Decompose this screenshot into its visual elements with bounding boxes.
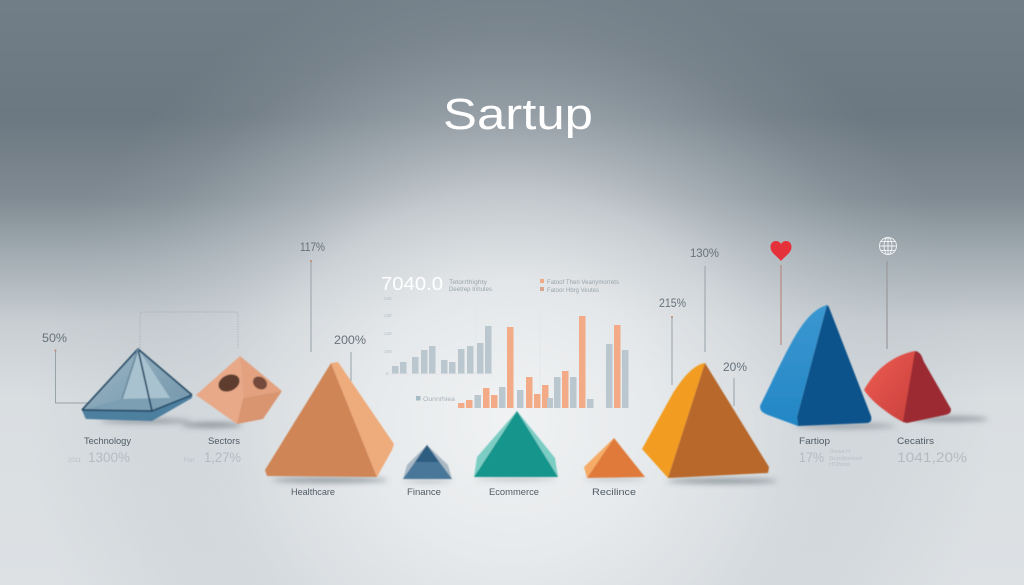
label: Cecatirs: [897, 436, 967, 465]
callout: 117%: [300, 240, 325, 352]
label: Healthcare: Healthcare: [291, 487, 335, 498]
title: Sartup: [443, 90, 593, 139]
label: Sectors: 1,27%: [204, 449, 241, 465]
label: Recilince: Recilince: [592, 487, 636, 498]
chart subtitle: Deetrep Inhutes: [449, 287, 492, 293]
callout: 200%: [334, 333, 366, 381]
label: Sectors: Fort: [184, 458, 195, 464]
shape: glass pyramid: [82, 349, 192, 421]
shape: healthcare pyramid: [265, 362, 394, 477]
upper grey bars: [392, 326, 492, 374]
label: Cecatirs: 1041,20%: [897, 449, 967, 465]
shadow layer: [100, 416, 988, 484]
label: Fartiop: Somitonrad: [829, 456, 862, 462]
callout: 130%: [690, 246, 719, 352]
lower bars: [458, 316, 628, 408]
callout: 117%: 117%: [300, 240, 325, 254]
label: Fartiop: Jhowa H: [829, 449, 850, 455]
label: Ecommerce: Ecommerce: [489, 487, 539, 498]
icon: globe with leader line: [880, 238, 896, 349]
chart headline number: 7040.0: [381, 274, 443, 294]
chart axis labels: 120: [384, 331, 392, 336]
shape: finance pyramid: [403, 445, 452, 479]
chart axis labels: 0: [386, 371, 389, 376]
chart legend: Fatoof Then Veanymorrets: [547, 280, 619, 286]
chart axis labels: 100: [384, 349, 392, 354]
chart panel: [381, 274, 628, 408]
label: Technology: 2011: [68, 458, 82, 464]
chart subtitle: [449, 280, 492, 293]
callout: 130%: 130%: [690, 246, 719, 260]
label: Fartiop: [799, 436, 862, 468]
chart axis labels: 140: [384, 296, 392, 301]
label: Fartiop: Fartiop: [799, 436, 830, 447]
callout: 215%: [659, 296, 686, 385]
chart subtitle: Tetorrthighty: [449, 280, 487, 286]
shape: blue rounded pyramid: [760, 305, 871, 426]
shape: peach pyramid with holes: [196, 356, 282, 424]
callout: 200%: 200%: [334, 333, 366, 347]
shape: amber pyramid: [642, 363, 769, 478]
grid: [382, 302, 610, 404]
chart axis labels: [384, 296, 392, 376]
dotted connector box: [140, 312, 238, 348]
label: Cecatirs: Cecatirs: [897, 436, 934, 447]
callout: 20%: [723, 360, 747, 406]
chart legend: [540, 279, 619, 294]
label: Fartiop: HOhma: [829, 462, 850, 468]
label: Technology: 1300%: [88, 449, 130, 465]
label: Technology: Technology: [84, 436, 131, 447]
label: Sectors: Sectors: [208, 436, 240, 447]
label: Finance: Finance: [407, 487, 441, 498]
chart legend: Fatoor Hbrg Veutes: [547, 288, 599, 294]
label: Sectors: [184, 436, 241, 465]
chart axis labels: 130: [384, 313, 392, 318]
lower legend: Ounnrhiea: [423, 396, 455, 403]
callout: 215%: 215%: [659, 296, 686, 310]
callout: 20%: 20%: [723, 360, 747, 374]
icon: heart with leader line: [770, 241, 792, 345]
callout: 50%: [42, 331, 88, 403]
label: Fartiop: 17%: [799, 449, 824, 465]
callout: 50%: 50%: [42, 331, 67, 345]
shape: red rounded pyramid: [864, 351, 951, 423]
shape: small orange pyramid: [584, 438, 645, 478]
shape: ecommerce pyramid: [474, 411, 558, 477]
label: Technology: [68, 436, 131, 465]
